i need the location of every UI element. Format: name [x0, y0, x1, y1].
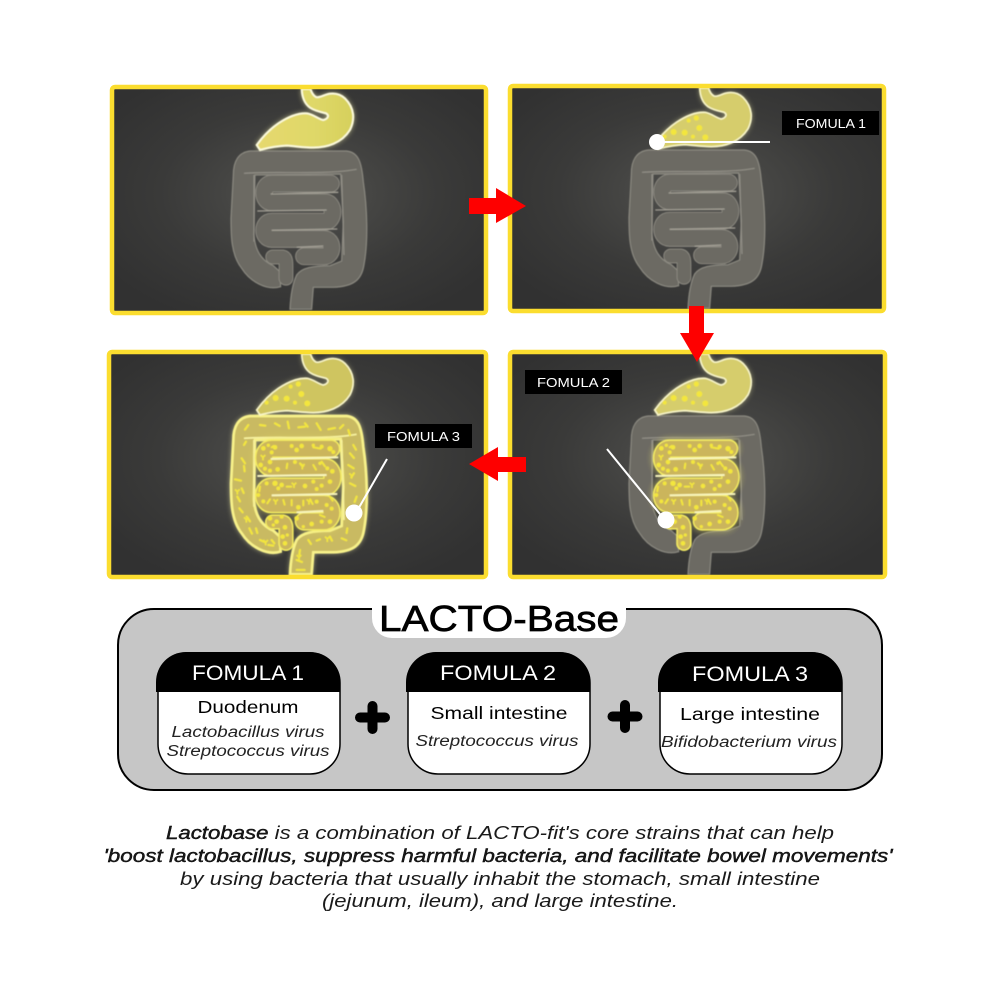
pointer line and dot: formula 3	[346, 459, 387, 522]
card: formula 3: FOMULA 3	[692, 663, 808, 686]
card: formula 2: FOMULA 2	[440, 662, 556, 685]
pointer line and dot: formula 1	[649, 134, 770, 150]
description text: 'boost lactobacillus, suppress harmful bacteria, and facilitate bowel movements'	[104, 845, 894, 866]
anatomy illustration: whole gut glowing yellow	[231, 354, 367, 574]
pointer line and dot: formula 2	[607, 449, 674, 528]
description text	[104, 822, 894, 911]
arrow: panel 1 to panel 2	[469, 188, 526, 223]
card: formula 2	[406, 652, 590, 774]
card: formula 3	[658, 652, 842, 774]
arrow: panel 3 to panel 4	[469, 447, 526, 481]
card: formula 1	[156, 652, 340, 774]
panel 1: stomach highlighted	[112, 87, 486, 313]
panel 3: formula 2 in small intestine	[510, 352, 885, 577]
panel 2: formula 1 in duodenum	[510, 86, 884, 311]
card: formula 3: Bifidobacterium virus	[661, 734, 837, 751]
anatomy illustration: stomach with probiotic dots	[629, 88, 765, 308]
card: formula 2: Small intestine	[430, 703, 568, 723]
description text: Lactobase is a combination of LACTO-fit's core strains that can help	[166, 822, 834, 843]
card: formula 3: Large intestine	[680, 704, 820, 724]
description text: (jejunum, ileum), and large intestine.	[322, 890, 678, 911]
icon: plus	[360, 706, 385, 729]
label: formula 2: FOMULA 2	[537, 375, 610, 390]
icon: plus	[612, 705, 638, 728]
arrow: panel 2 to panel 3	[680, 306, 714, 362]
card: formula 1: Streptococcus virus	[166, 743, 330, 760]
card: formula 2: Streptococcus virus	[416, 733, 579, 750]
label: formula 3: FOMULA 3	[387, 429, 460, 444]
anatomy illustration: stomach glowing with grey intestines	[231, 89, 367, 309]
heading: LACTO-Base: LACTO-Base	[379, 598, 619, 639]
panel: LACTO-Base	[118, 598, 882, 790]
description text: by using bacteria that usually inhabit the stomach, small intestine	[180, 868, 820, 889]
label: formula 2	[525, 370, 622, 394]
label: formula 3	[375, 424, 472, 448]
panel 4: formula 3 in large intestine	[109, 352, 486, 577]
anatomy illustration: stomach and small intestine yellow	[629, 354, 765, 574]
card: formula 1: Duodenum	[198, 697, 298, 717]
card: formula 1: FOMULA 1	[192, 662, 304, 685]
label: formula 1: FOMULA 1	[796, 116, 866, 131]
label: formula 1	[782, 111, 879, 135]
card: formula 1: Lactobacillus virus	[172, 724, 325, 741]
